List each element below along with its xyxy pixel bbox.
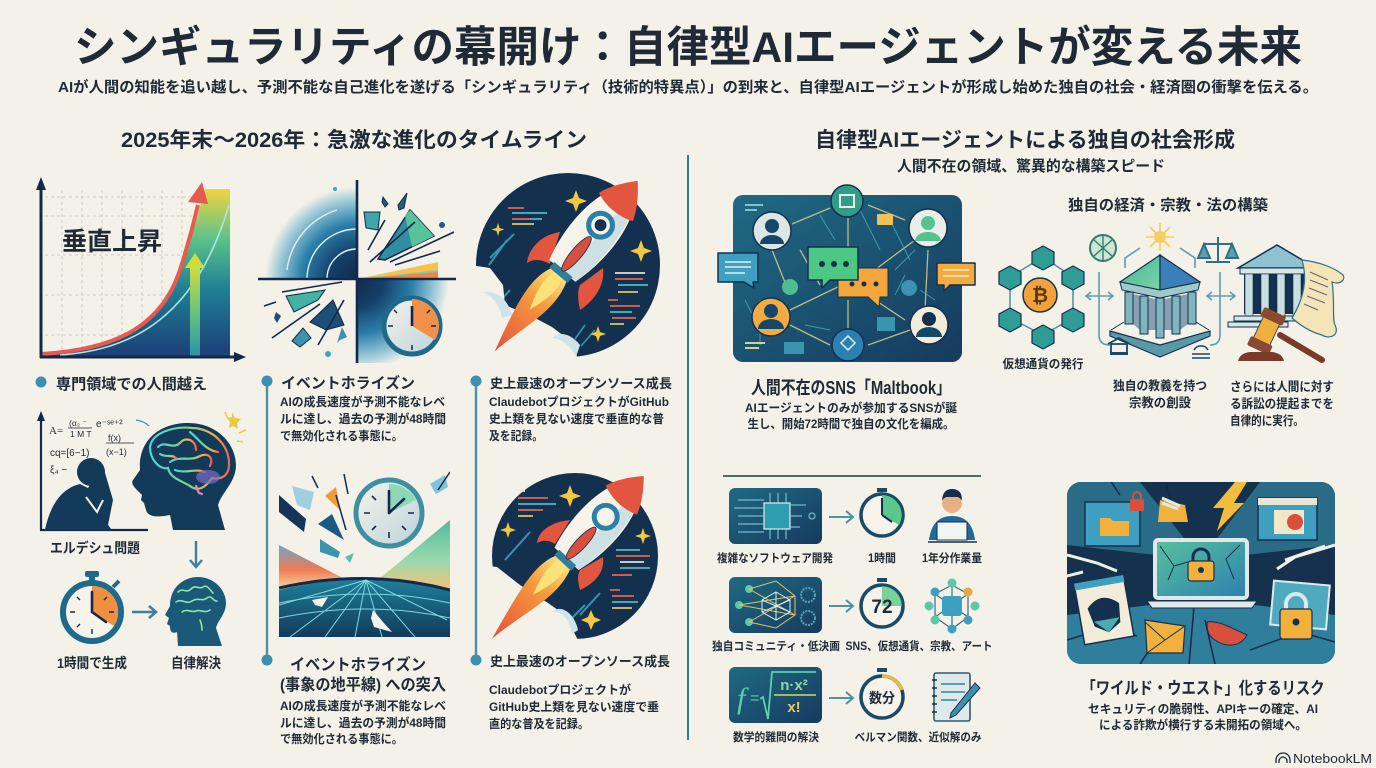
icon: religion temple (1090, 223, 1220, 358)
illustration: Erdos problem brain: 1 M T (70, 429, 92, 439)
row: community and law: SNS、仮想通貨、宗教、アート (846, 639, 992, 653)
text block: open source growth detail: 史上最速のオープンソース成長 (490, 654, 670, 669)
illustration: horizon with clock (279, 472, 450, 637)
text block: open source growth: 史上最速のオープンソース成長 (490, 376, 672, 391)
row: software development: 1年分作業量 (922, 551, 982, 565)
text block: wild west risk: 「ワイルド・ウエスト」化するリスク (1082, 679, 1324, 698)
label: Erdos problem: エルデシュ問題 (50, 540, 140, 556)
arrow: blockchain to temple (1086, 292, 1113, 300)
illustration: Erdos problem brain: ξ₄ − (50, 465, 67, 476)
text block: open source growth: ClaudebotプロジェクトがGitHub (489, 394, 669, 409)
badge: NotebookLM: NotebookLM (1293, 751, 1372, 766)
chart: vertical rise curve (36, 177, 246, 362)
label: lawsuit against humans: る訴訟の提起までを (1230, 396, 1334, 411)
row: math problems: 数分 (869, 690, 895, 706)
subheading: society: 人間不在の領域、驚異的な構築スピード (897, 157, 1165, 175)
text block: wild west risk: セキュリティの脆弱性、APIキーの確定、AI (1088, 701, 1318, 716)
heading: autonomous society: 自律型AIエージェントによる独自の社会形成 (815, 128, 1235, 152)
heading: timeline: 2025年末〜2026年：急激な進化のタイムライン (121, 129, 587, 152)
arrow: stopwatch to head (132, 606, 156, 618)
row: math problems: x! (787, 699, 801, 716)
text block: Maltbook: 生し、開始72時間で独自の文化を編成。 (748, 416, 954, 431)
text block: event horizon: ルに達し、過去の予測が48時間 (280, 411, 446, 426)
text block: entering the event horizon: AIの成長速度が予測不能なレベ (280, 698, 446, 713)
label: founding a religion: 宗教の創設 (1129, 395, 1191, 410)
text block: open source growth (489, 376, 672, 443)
label: lawsuit against humans (1230, 379, 1334, 428)
label: lawsuit against humans: 自律的に実行。 (1230, 413, 1304, 428)
row: community and law (712, 577, 992, 653)
illustration: rocket one (476, 173, 660, 357)
icon: head with neural pattern (165, 577, 226, 646)
row: math problems: 数学的難問の解決 (733, 730, 819, 744)
text block: open source growth detail: Claudebotプロジェクトが (489, 682, 631, 697)
label: generated in one hour: 1時間で生成 (57, 655, 127, 671)
text block: event horizon: イベントホライズン (281, 374, 415, 392)
item: superhuman expertise: 専門領域での人間越え (56, 375, 207, 393)
label: founding a religion (1113, 378, 1207, 410)
icon: scales (1198, 237, 1238, 262)
text block: open source growth detail: GitHub史上類を見ない速度で垂 (489, 699, 659, 714)
text block: Maltbook: AIエージェントのみが参加するSNSが誕 (745, 400, 957, 415)
text block: wild west risk: による詐欺が横行する未開拓の領域へ。 (1099, 717, 1307, 732)
row: community and law: 72 (871, 597, 893, 618)
row: math problems: = (750, 690, 759, 707)
timeline column: event horizon (262, 376, 272, 666)
illustration: event horizon shattering (258, 180, 456, 371)
text block: event horizon: AIの成長速度が予測不能なレベ (280, 394, 445, 409)
arrow: down to autonomous solve (190, 541, 202, 567)
illustration: rocket two (492, 473, 658, 639)
subtitle: AIが人間の知能を追い越し、予測不能な自己進化を遂げる「シンギュラリティ（技術的特異点）」の到来と、自律型AIエージェントが形成し始めた独自の社会・経済圏の衝撃を伝える。 (58, 78, 1318, 96)
icon: bitcoin blockchain (999, 246, 1084, 349)
text block: entering the event horizon: イベントホライズン (290, 655, 426, 674)
text block: open source growth detail: 直的な普及を記録。 (489, 716, 589, 731)
text block: entering the event horizon (280, 655, 446, 746)
label: founding a religion: 独自の教義を持つ (1113, 378, 1207, 393)
text block: event horizon (280, 374, 446, 443)
illustration: Erdos problem brain: (α₂ ⁻ (69, 418, 87, 428)
text block: Maltbook: 人間不在のSNS「Maltbook」 (751, 378, 951, 398)
row: math problems (729, 667, 982, 744)
timeline column: open source growth (470, 376, 482, 666)
row: math problems: n·x² (780, 677, 808, 694)
row: math problems: ベルマン関数、近似解のみ (854, 730, 982, 744)
row: community and law: 独自コミュニティ・低決画 (712, 639, 840, 653)
text block: wild west risk (1082, 679, 1324, 732)
text block: entering the event horizon: ルに達し、過去の予測が48時間 (280, 715, 446, 730)
illustration: Erdos problem brain: e⁻ˢᵉ⁺² (96, 419, 123, 430)
illustration: Erdos problem brain: cq=[6−1) (50, 448, 89, 459)
icon: stopwatch one hour (63, 571, 121, 641)
text block: entering the event horizon: で無効化される事態に。 (280, 731, 403, 746)
heading: economy religion law: 独自の経済・宗教・法の構築 (1068, 196, 1268, 214)
row: software development (717, 488, 982, 565)
icon: court, scroll and gavel (1228, 245, 1344, 361)
label: autonomous solve: 自律解決 (171, 655, 221, 671)
text block: event horizon: で無効化される事態に。 (280, 428, 403, 443)
illustration: Erdos problem brain: f(x) (108, 433, 121, 443)
row: software development: 複雑なソフトウェア開発 (717, 551, 833, 565)
row: software development: 1時間 (868, 551, 896, 565)
text block: open source growth detail (489, 654, 670, 731)
illustration: Erdos problem brain: (x−1) (106, 447, 127, 457)
text block: entering the event horizon: (事象の地平線) への突入 (280, 675, 446, 694)
text block: Maltbook (745, 378, 957, 431)
arrow: temple to court (1207, 292, 1235, 300)
label: crypto issuance: 仮想通貨の発行 (1002, 356, 1084, 371)
icon: bitcoin blockchain: ₿ (1032, 285, 1048, 307)
illustration: Erdos problem brain (37, 411, 246, 530)
illustration: wild west risk (1063, 480, 1335, 665)
text block: open source growth: 及を記録。 (489, 428, 543, 443)
text block: open source growth: 史上類を見ない速度で垂直的な普 (489, 411, 664, 426)
title: シンギュラリティの幕開け：自律型AIエージェントが変える未来 (74, 24, 1302, 72)
row: math problems: f (737, 682, 749, 715)
illustration: Erdos problem brain: A= (49, 425, 63, 437)
illustration: Maltbook network (718, 185, 975, 362)
label: lawsuit against humans: さらには人間に対す (1230, 379, 1334, 394)
chart: vertical rise curve: 垂直上昇 (62, 228, 162, 256)
